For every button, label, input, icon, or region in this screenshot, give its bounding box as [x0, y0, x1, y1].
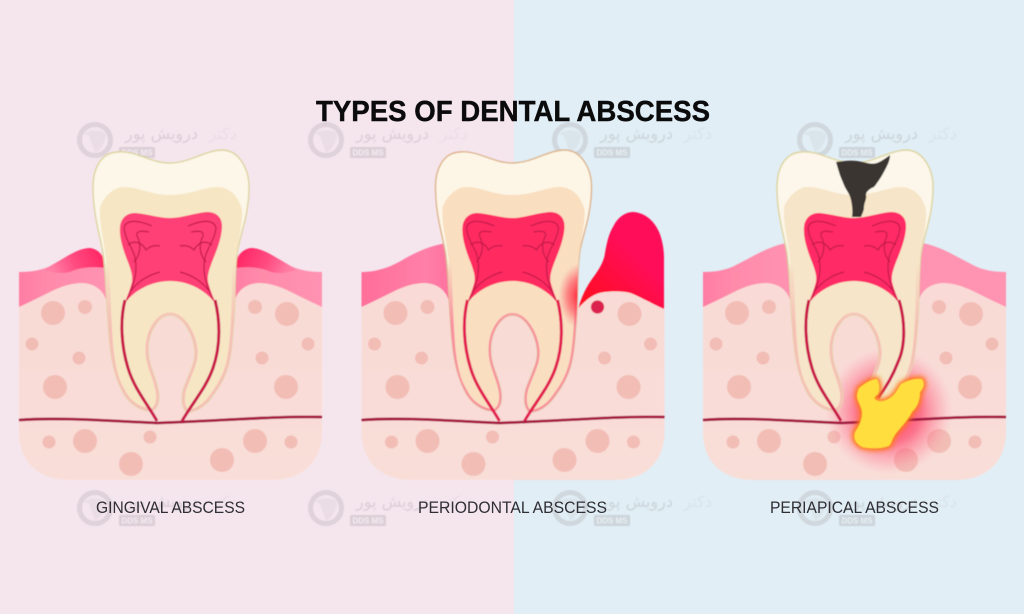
tooth: periodontal: [436, 150, 598, 421]
panel: periapical abscess: [703, 150, 1006, 480]
panel: gingival abscess: [19, 150, 322, 480]
drainage dot: [591, 300, 604, 314]
nerve baseline: gingival: [19, 417, 322, 423]
label: gingival abscess: GINGIVAL ABSCESS: [96, 499, 245, 517]
bone and tissue base: gingival: [19, 283, 322, 480]
label: periapical abscess: PERIAPICAL ABSCESS: [770, 499, 939, 517]
gum: gingival: [19, 248, 322, 325]
bone spots: periapical: [710, 300, 998, 476]
watermark logos: [80, 124, 957, 526]
inflammation glow: [825, 347, 953, 475]
tooth: gingival: [93, 150, 249, 421]
bone spots: periodontal: [368, 300, 657, 476]
bone spots: gingival: [26, 300, 314, 476]
gum: periapical: [703, 243, 1006, 325]
inflamed root patch: [560, 266, 578, 325]
background left pink half: [0, 0, 514, 614]
caries cavity: [836, 155, 890, 217]
gum: periodontal left: [362, 243, 452, 325]
background right blue half: [514, 0, 1024, 614]
pus blob: [854, 379, 924, 448]
label: periodontal abscess: PERIODONTAL ABSCESS: [418, 499, 607, 517]
title: TYPES OF DENTAL ABSCESS: [316, 96, 710, 128]
tooth: periapical: [777, 150, 933, 421]
nerve baseline: periapical: [703, 417, 1006, 423]
bone and tissue base: periodontal: [362, 283, 664, 480]
panel: periodontal abscess: [362, 150, 664, 480]
nerve baseline: periodontal: [362, 417, 664, 423]
bone and tissue base: periapical: [703, 283, 1006, 480]
abscess swelling: [578, 212, 664, 309]
